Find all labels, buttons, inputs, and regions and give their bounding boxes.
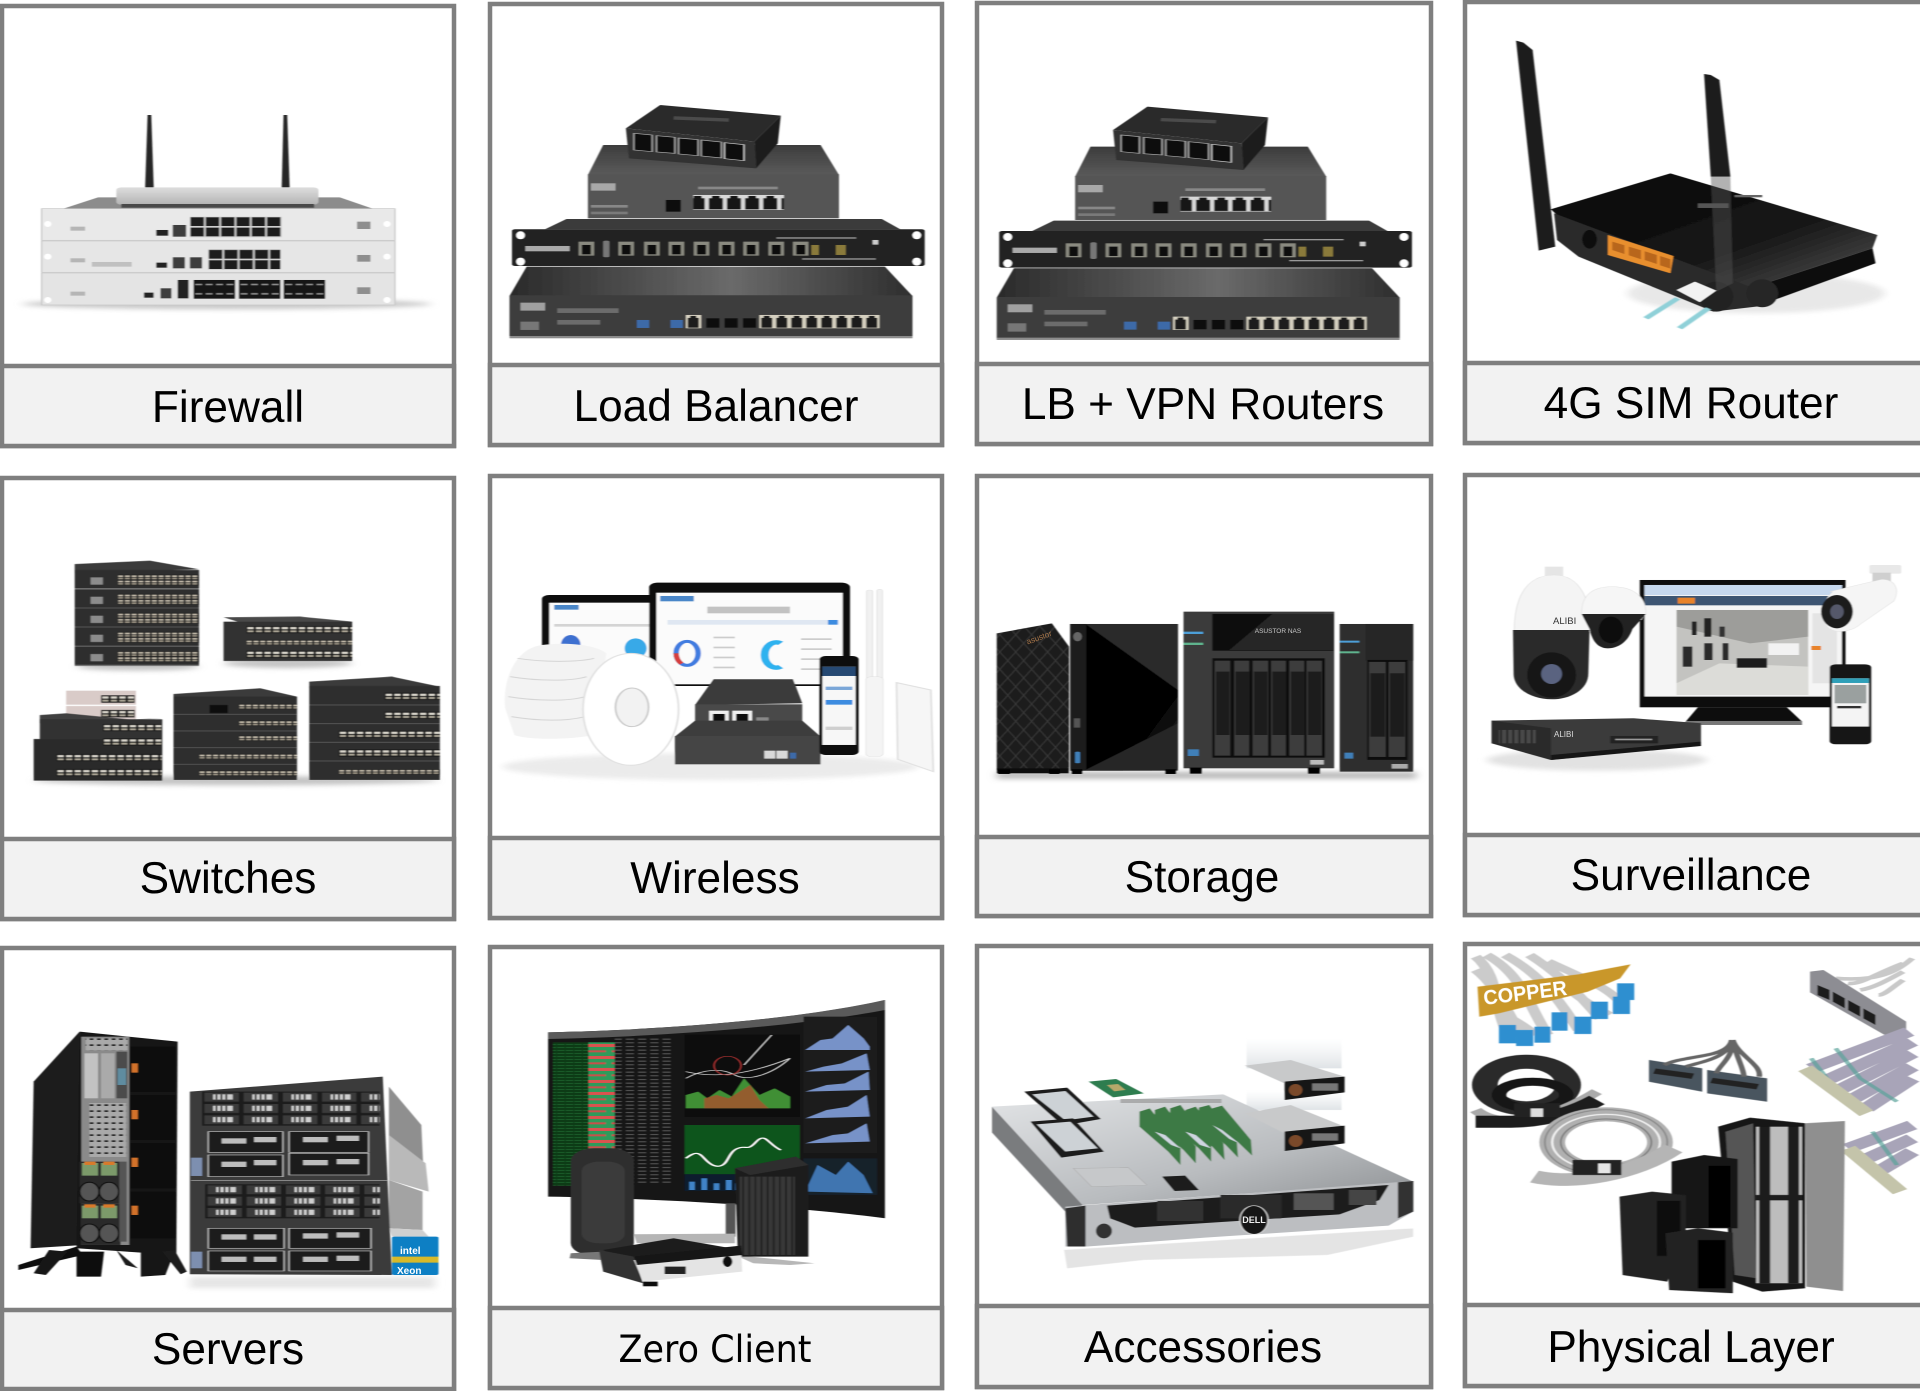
panel: surveillance <box>1465 475 1920 915</box>
icon: stacked VPN routers <box>997 107 1412 340</box>
heading: zero client: Zero Client <box>618 1328 812 1371</box>
small text: NVR brand: ALIBI <box>1554 730 1574 739</box>
icon: cables, patch panels and racks <box>1476 955 1912 1293</box>
panel: physical layer <box>1465 944 1920 1386</box>
panel: accessories <box>977 946 1431 1387</box>
icon: rack server with accessories <box>992 1038 1413 1268</box>
icon: 4G router with antennas <box>1516 41 1885 328</box>
panel: LB + VPN routers <box>977 3 1431 444</box>
panel: wireless <box>490 476 942 918</box>
small text: NAS display: ASUSTOR NAS <box>1255 628 1302 635</box>
icon: stacked load balancer routers <box>510 105 925 338</box>
heading: wireless: Wireless <box>630 854 800 903</box>
panel: firewall <box>2 6 454 446</box>
panel: load balancer <box>490 4 942 445</box>
icon: curved monitor and thin clients <box>548 1000 885 1286</box>
small text: intel badge: intel <box>400 1246 421 1257</box>
heading: 4G SIM router: 4G SIM Router <box>1544 379 1838 428</box>
small text: camera brand: ALIBI <box>1553 616 1576 627</box>
icon: stacked firewall appliances <box>21 115 432 309</box>
heading: physical layer: Physical Layer <box>1547 1323 1835 1372</box>
heading: LB + VPN routers: LB + VPN Routers <box>1022 380 1384 429</box>
heading: servers: Servers <box>152 1325 304 1374</box>
heading: accessories: Accessories <box>1084 1323 1322 1372</box>
small text: NAS brand: asustor <box>1025 629 1053 646</box>
icon: cameras, monitor, NVR and phone <box>1487 565 1901 771</box>
heading: load balancer: Load Balancer <box>574 382 858 431</box>
panel: zero client <box>490 947 942 1388</box>
heading: surveillance: Surveillance <box>1571 851 1811 900</box>
small text: Xeon badge: Xeon <box>397 1266 421 1277</box>
small text: copper banner: COPPER <box>1482 977 1568 1010</box>
small text: Dell logo: DELL <box>1242 1215 1266 1225</box>
icon: wireless access points and tablets <box>502 583 933 780</box>
icon: tower and blade servers <box>18 1032 438 1288</box>
icon: NAS storage units <box>997 612 1416 779</box>
heading: firewall: Firewall <box>152 383 304 432</box>
heading: switches: Switches <box>140 854 316 903</box>
panel: 4G SIM router <box>1465 2 1920 443</box>
icon: stacks of network switches <box>34 561 440 785</box>
panel: switches <box>2 478 454 919</box>
heading: storage: Storage <box>1125 853 1279 902</box>
panel: storage <box>977 476 1431 916</box>
panel: servers <box>2 948 454 1389</box>
